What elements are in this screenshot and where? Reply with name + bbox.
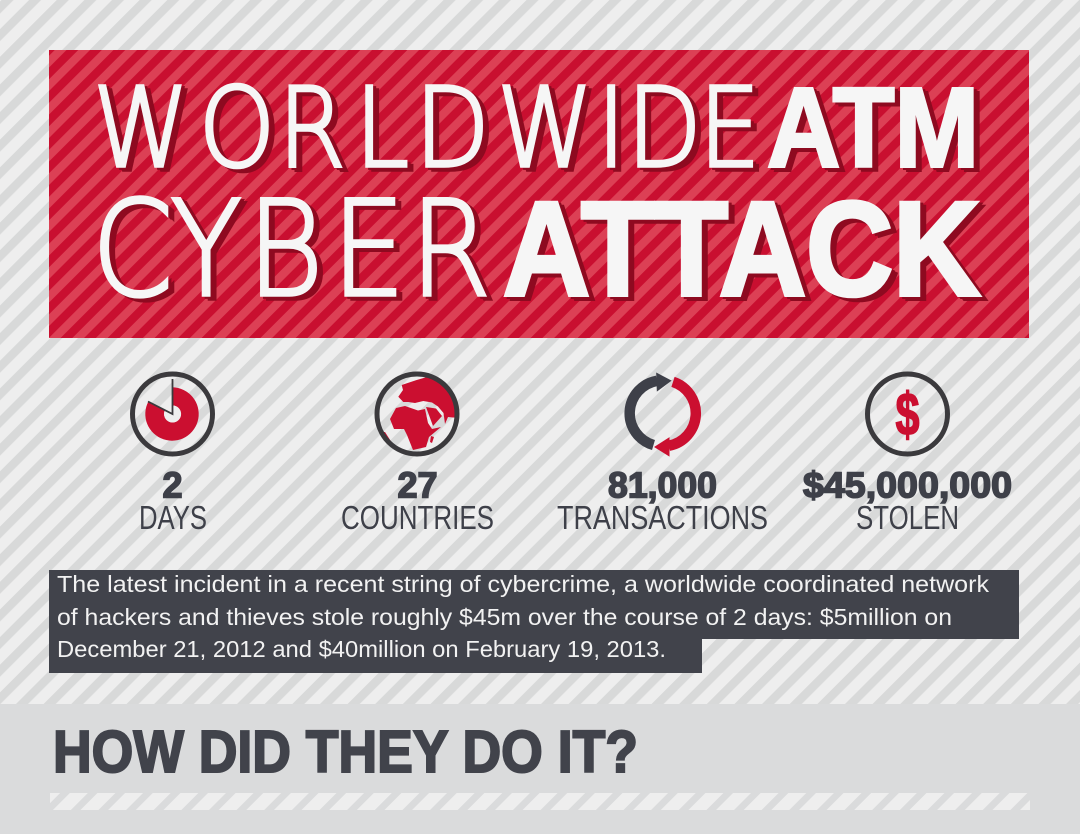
panel: how did they do it (0, 704, 1080, 834)
number: 81,000: 81,000 (608, 464, 717, 506)
number: 2: 2 (162, 464, 183, 506)
stat: $45,000,000 stolen (803, 374, 1012, 536)
text block: description: The latest incident in a recent string of cybercrime, a worldwide coordinated network (57, 571, 990, 597)
label: transactions: TRANSACTIONS (557, 499, 768, 536)
striped divider (50, 793, 1030, 810)
label: countries: COUNTRIES (341, 499, 494, 536)
panel: title banner (49, 50, 1029, 338)
icon: globe (375, 374, 460, 454)
number: 27: 27 (397, 464, 438, 506)
title line 2: CYBER ATTACK (92, 174, 980, 327)
title line 1: WORLDWIDE ATM: ATM (767, 64, 979, 190)
icon: clock (132, 374, 212, 454)
icon: cycle arrows (630, 373, 696, 456)
stat: 81,000 transactions (557, 373, 768, 536)
label: stolen: STOLEN (856, 499, 959, 536)
stat: 27 countries (341, 374, 494, 536)
title line 1: WORLDWIDE ATM: WORLDWIDE (93, 65, 760, 193)
number: $45,000,000: $45,000,000 (803, 464, 1012, 506)
title line 2: CYBER ATTACK: ATTACK (503, 175, 980, 324)
text block: description: of hackers and thieves stole roughly $45m over the course of 2 days: $5million on (57, 604, 952, 630)
stat: 2 days (132, 374, 212, 536)
heading: HOW DID THEY DO IT? (53, 719, 638, 785)
title line 2: CYBER ATTACK: CYBER (92, 174, 491, 327)
icon: dollar: $ (896, 381, 920, 448)
text block: description (49, 570, 1019, 673)
text block: description: December 21, 2012 and $40million on February 19, 2013. (57, 636, 666, 662)
label: days: DAYS (139, 499, 207, 536)
icon: dollar (868, 374, 948, 454)
